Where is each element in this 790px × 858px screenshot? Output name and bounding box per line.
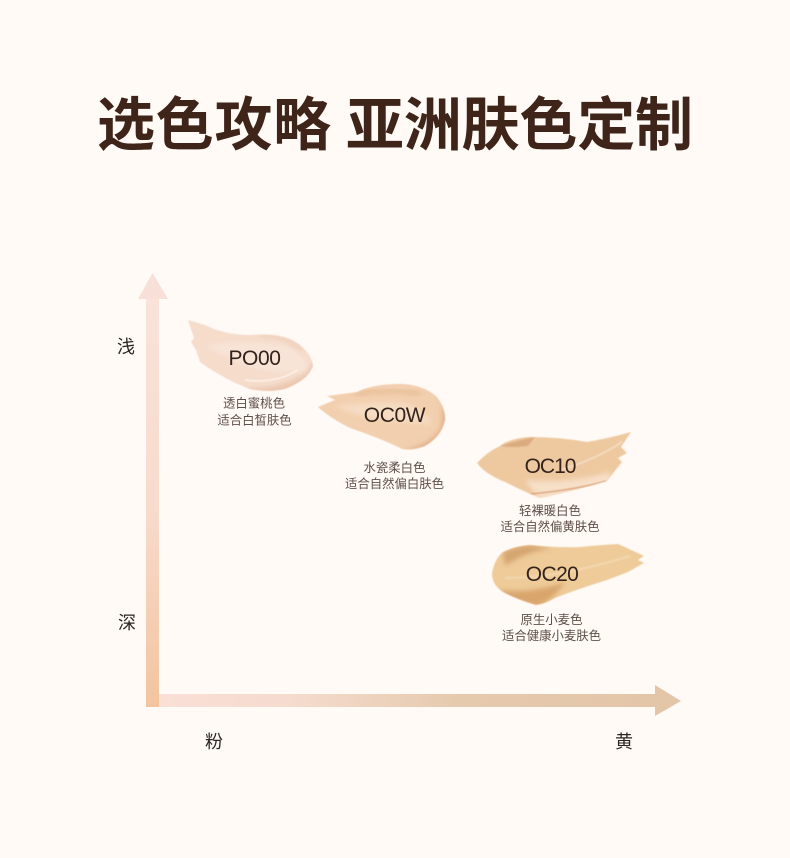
code OC20: OC20 [526, 563, 578, 586]
smear shape OC0W [318, 383, 446, 450]
code OC10: OC10 [525, 455, 576, 478]
description PO00: 透白蜜桃色 [223, 394, 285, 412]
description OC10: 适合自然偏黄肤色 [500, 517, 600, 535]
smear shape OC20 [492, 544, 644, 606]
title [97, 78, 693, 162]
axis label: pink: 粉 [205, 728, 223, 754]
swatch: OC0W [315, 380, 450, 492]
code OC0W: OC0W [364, 404, 426, 427]
description OC0W: 适合自然偏白肤色 [345, 474, 444, 492]
axis label: deep: 深 [118, 609, 136, 635]
description OC20: 原生小麦色 [521, 610, 582, 628]
description OC10: 轻裸暖白色 [519, 501, 581, 519]
swatch: PO00 [185, 318, 316, 428]
description OC0W: 水瓷柔白色 [364, 458, 425, 476]
swatch: OC20 [490, 540, 646, 644]
smear shape PO00 [188, 320, 314, 392]
title: 亚洲肤色定制 [346, 78, 693, 162]
description PO00: 适合白皙肤色 [217, 410, 292, 428]
axis label: yellow: 黄 [615, 728, 633, 754]
axis label: light: 浅 [117, 333, 135, 359]
smear shape OC10 [475, 430, 635, 500]
title: 选色攻略 [97, 78, 331, 162]
description OC20: 适合健康小麦肤色 [502, 626, 601, 644]
swatch: OC10 [475, 430, 635, 535]
code PO00: PO00 [228, 347, 281, 370]
vertical axis arrow: light to deep [138, 273, 168, 707]
horizontal axis arrow: pink to yellow [159, 685, 681, 716]
